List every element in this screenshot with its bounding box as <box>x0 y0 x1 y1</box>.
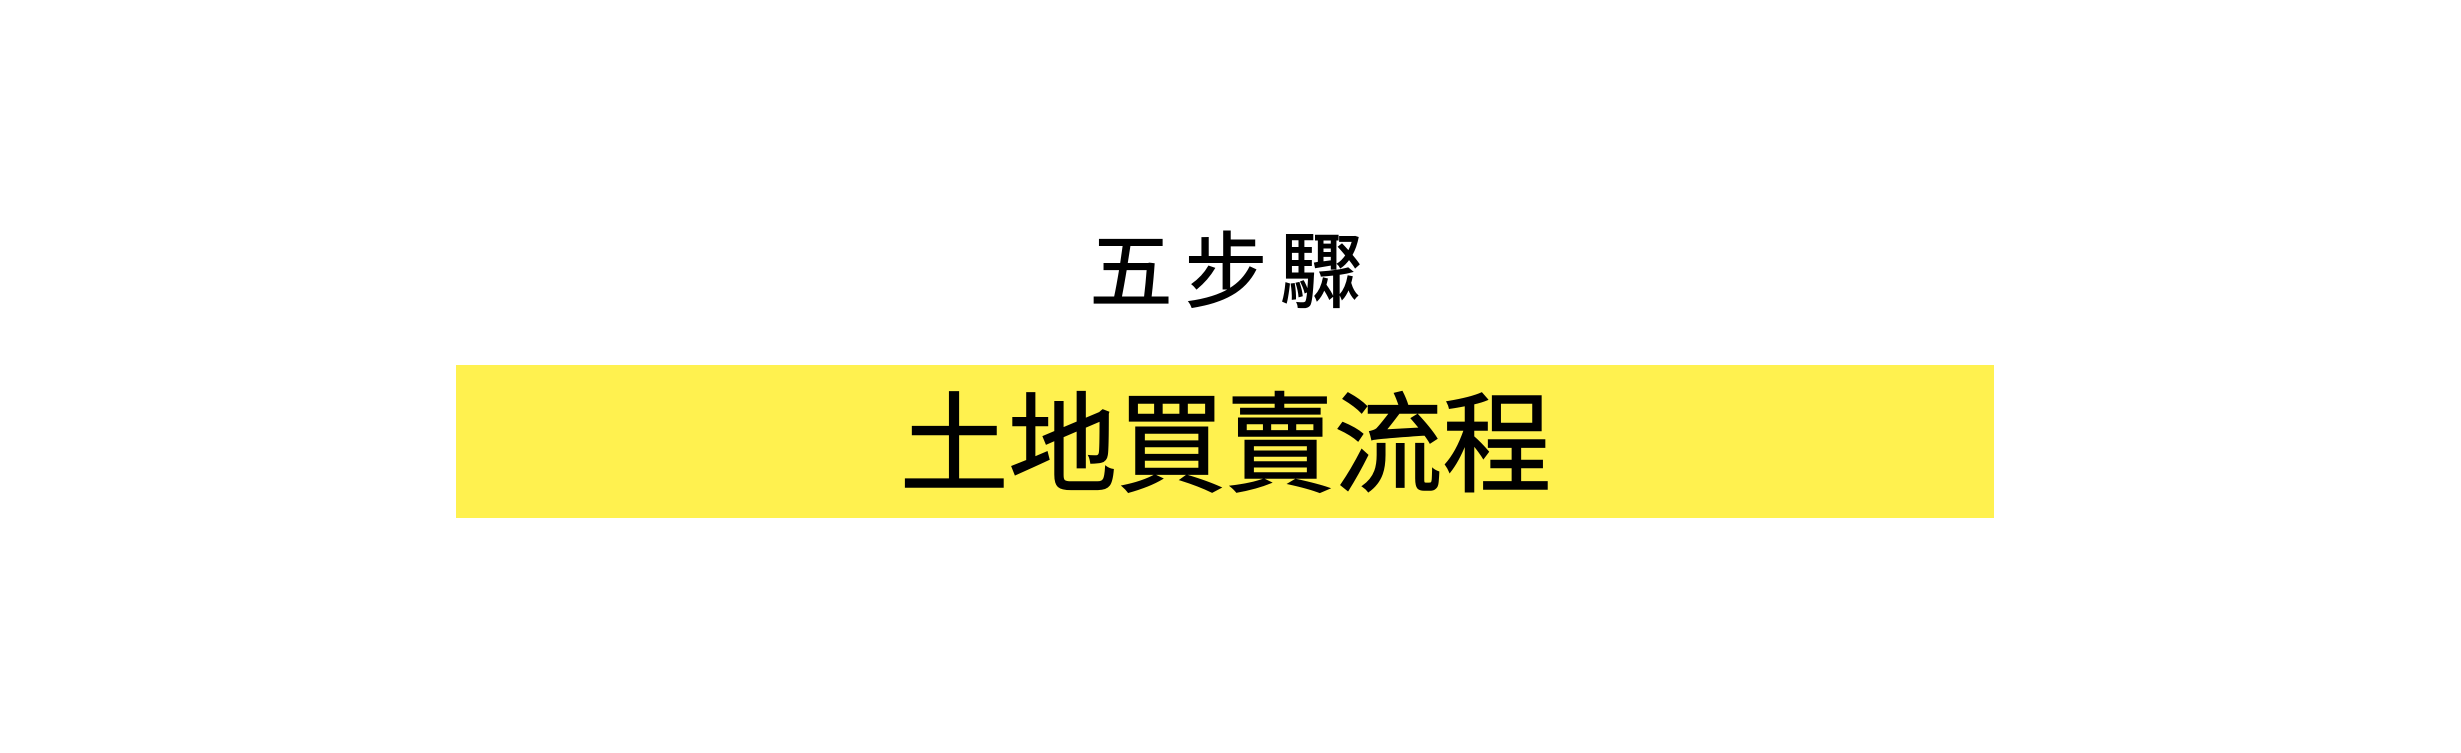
title: land transaction process: 土地買賣流程 <box>900 385 1551 506</box>
subtitle: five steps: 五步驟 <box>1090 226 1374 319</box>
title banner <box>456 365 1994 518</box>
